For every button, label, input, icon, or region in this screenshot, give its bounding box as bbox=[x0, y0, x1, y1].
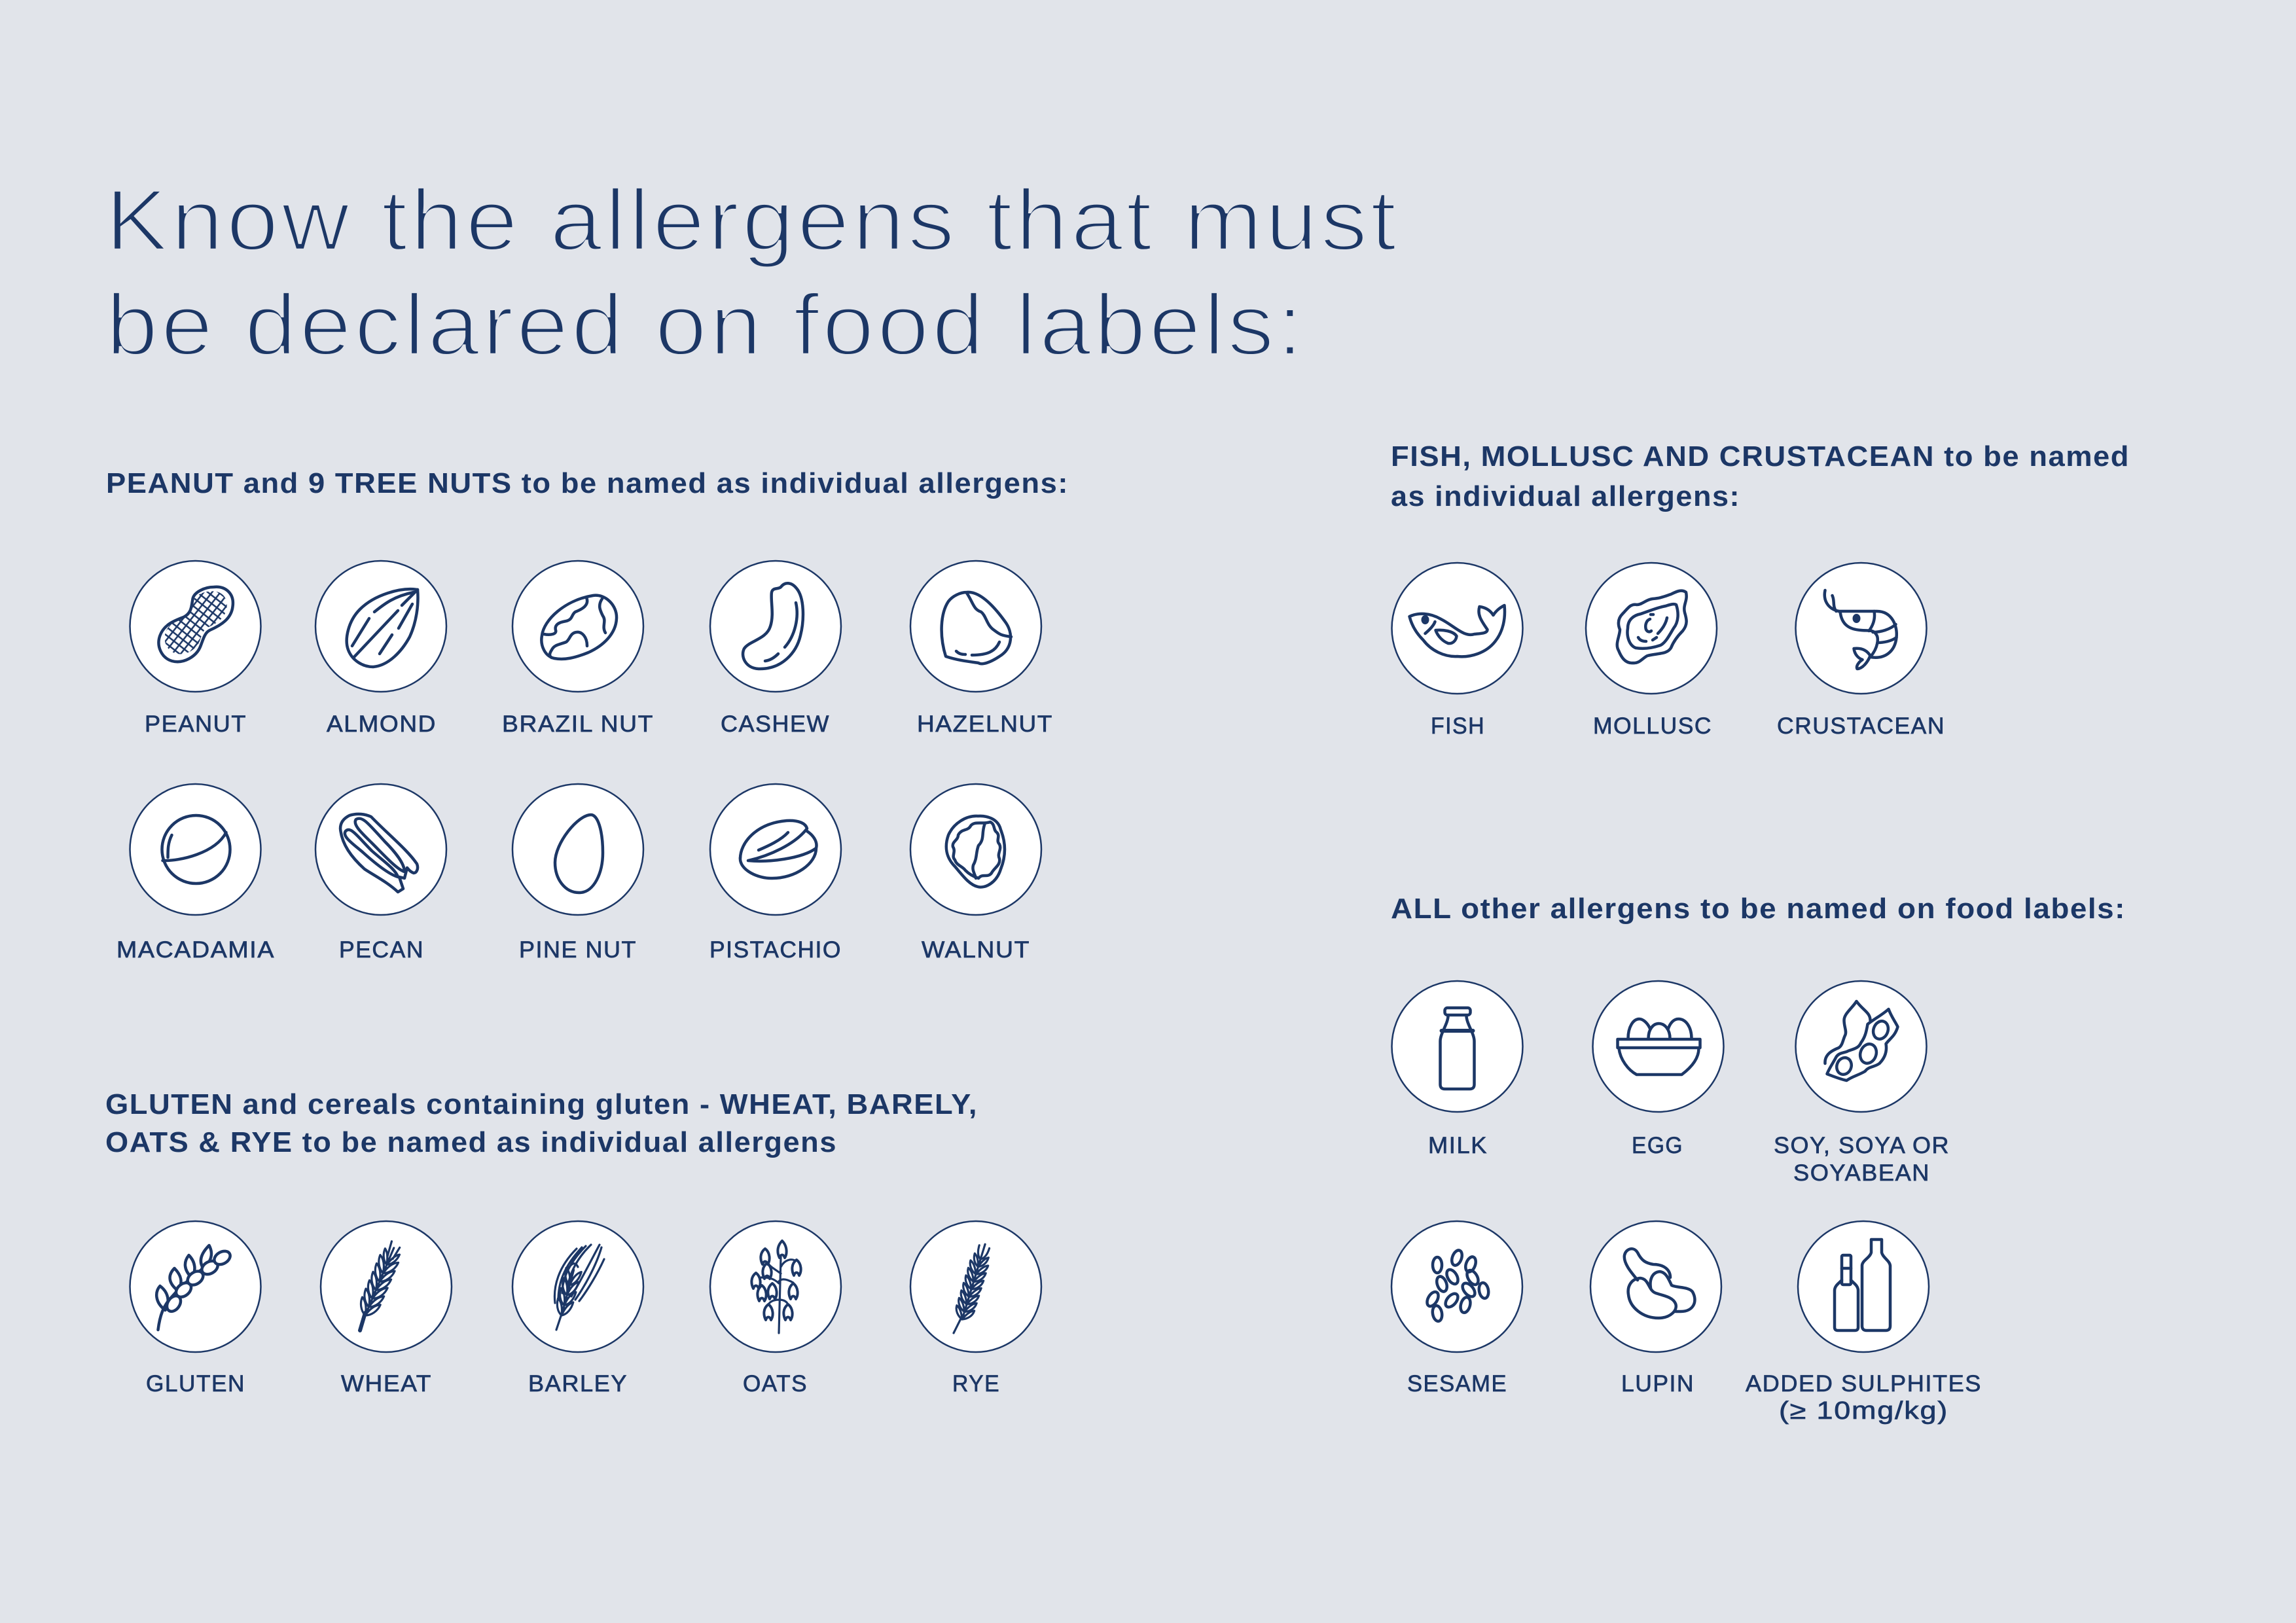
allergen: gluten bbox=[130, 1221, 260, 1397]
allergen: hazelnut bbox=[910, 561, 1053, 737]
title bbox=[105, 172, 1399, 374]
label: barley: BARLEY bbox=[528, 1371, 628, 1397]
label: sesame: SESAME bbox=[1407, 1371, 1507, 1397]
allergen: cashew bbox=[710, 561, 841, 737]
icon: pecan bbox=[340, 814, 418, 892]
allergen: walnut bbox=[910, 784, 1041, 963]
icon: eggs in bowl bbox=[1618, 1019, 1700, 1075]
allergen: soy bbox=[1774, 981, 1950, 1186]
icon: oats bbox=[751, 1241, 801, 1333]
allergen: almond bbox=[315, 561, 446, 737]
heading: fish, mollusc and crustacean bbox=[1391, 440, 2130, 512]
heading: peanut and tree nuts: PEANUT and 9 TREE NUTS to be named as individual allergens: bbox=[106, 467, 1069, 499]
label: cashew: CASHEW bbox=[721, 711, 830, 737]
icon: crustacean bbox=[1825, 590, 1897, 669]
allergen: brazil nut bbox=[502, 561, 654, 737]
label: soy, soya or soyabean: SOYABEAN bbox=[1793, 1160, 1930, 1186]
label: hazelnut: HAZELNUT bbox=[917, 711, 1053, 737]
icon: peanut bbox=[159, 587, 233, 662]
allergen: rye bbox=[910, 1221, 1041, 1397]
allergen: oats bbox=[710, 1221, 841, 1397]
icon: almond bbox=[347, 589, 418, 667]
allergen: crustacean bbox=[1777, 563, 1945, 739]
heading: fish, mollusc and crustacean: as individual allergens: bbox=[1391, 480, 1740, 512]
label: added sulphites bbox=[1746, 1371, 1982, 1425]
allergen: peanut bbox=[130, 561, 260, 737]
icon: bottles bbox=[1835, 1240, 1890, 1330]
icon: sesame seeds bbox=[1425, 1249, 1490, 1322]
icon: cashew bbox=[743, 583, 803, 669]
label: added sulphites: (≥ 10mg/kg) bbox=[1779, 1397, 1948, 1425]
label: mollusc: MOLLUSC bbox=[1593, 713, 1712, 739]
label: pecan: PECAN bbox=[339, 937, 424, 963]
icon: lupin beans bbox=[1624, 1249, 1695, 1318]
allergen: barley bbox=[512, 1221, 643, 1397]
icon: milk bottle bbox=[1440, 1008, 1474, 1089]
title: Know the allergens that must bbox=[105, 172, 1399, 269]
heading: gluten and cereals: OATS & RYE to be named as individual allergens bbox=[105, 1126, 837, 1158]
allergen: lupin bbox=[1590, 1221, 1721, 1397]
allergen: fish bbox=[1391, 563, 1522, 739]
heading: fish, mollusc and crustacean: FISH, MOLLUSC AND CRUSTACEAN to be named bbox=[1391, 440, 2130, 473]
label: gluten: GLUTEN bbox=[146, 1371, 245, 1397]
allergen: wheat bbox=[321, 1221, 452, 1397]
label: almond: ALMOND bbox=[327, 711, 437, 737]
label: egg: EGG bbox=[1632, 1133, 1683, 1158]
label: pine nut: PINE NUT bbox=[519, 937, 637, 963]
label: fish: FISH bbox=[1431, 713, 1485, 739]
label: milk: MILK bbox=[1428, 1133, 1488, 1158]
icon: mollusc bbox=[1617, 591, 1687, 663]
allergen: added sulphites bbox=[1746, 1221, 1982, 1425]
icon: fish bbox=[1410, 605, 1505, 656]
label: crustacean: CRUSTACEAN bbox=[1777, 713, 1945, 739]
icon: rye bbox=[954, 1241, 994, 1333]
icon: barley bbox=[554, 1245, 604, 1330]
icon: walnut bbox=[946, 816, 1005, 887]
title: be declared on food labels: bbox=[106, 277, 1306, 374]
label: peanut: PEANUT bbox=[145, 711, 247, 737]
panel: fish, mollusc and crustacean bbox=[1391, 440, 2130, 739]
allergen: pistachio bbox=[709, 784, 842, 963]
heading: gluten and cereals bbox=[105, 1088, 978, 1158]
icon: hazelnut bbox=[942, 592, 1011, 664]
label: brazil nut: BRAZIL NUT bbox=[502, 711, 654, 737]
label: added sulphites: ADDED SULPHITES bbox=[1746, 1371, 1982, 1397]
icon: wheat bbox=[356, 1240, 405, 1330]
heading: gluten and cereals: GLUTEN and cereals containing gluten - WHEAT, BARELY, bbox=[105, 1088, 978, 1120]
icon: gluten bbox=[156, 1245, 232, 1330]
label: walnut: WALNUT bbox=[922, 937, 1030, 963]
allergen: macadamia bbox=[117, 784, 275, 963]
allergen: egg bbox=[1593, 981, 1724, 1158]
label: soy, soya or soyabean: SOY, SOYA OR bbox=[1774, 1133, 1950, 1158]
icon: macadamia bbox=[162, 815, 230, 883]
allergen: sesame bbox=[1391, 1221, 1522, 1397]
allergen: milk bbox=[1391, 981, 1522, 1158]
icon: pistachio bbox=[740, 821, 816, 878]
label: wheat: WHEAT bbox=[341, 1371, 432, 1397]
allergen: mollusc bbox=[1586, 563, 1717, 739]
allergen: pecan bbox=[315, 784, 446, 963]
label: soy, soya or soyabean bbox=[1774, 1133, 1950, 1186]
icon: soybean pods bbox=[1825, 1001, 1898, 1080]
label: oats: OATS bbox=[743, 1371, 808, 1397]
icon: brazil nut bbox=[541, 596, 617, 659]
panel: peanut and tree nuts bbox=[106, 467, 1069, 963]
allergen: pine nut bbox=[512, 784, 643, 963]
panel: gluten and cereals bbox=[105, 1088, 1041, 1397]
heading: all other allergens: ALL other allergens to be named on food labels: bbox=[1391, 893, 2126, 925]
icon: pine nut bbox=[555, 815, 603, 893]
label: macadamia: MACADAMIA bbox=[117, 937, 275, 963]
label: lupin: LUPIN bbox=[1621, 1371, 1695, 1397]
label: rye: RYE bbox=[952, 1371, 1000, 1397]
panel: all other allergens bbox=[1391, 893, 2126, 1425]
label: pistachio: PISTACHIO bbox=[709, 937, 842, 963]
